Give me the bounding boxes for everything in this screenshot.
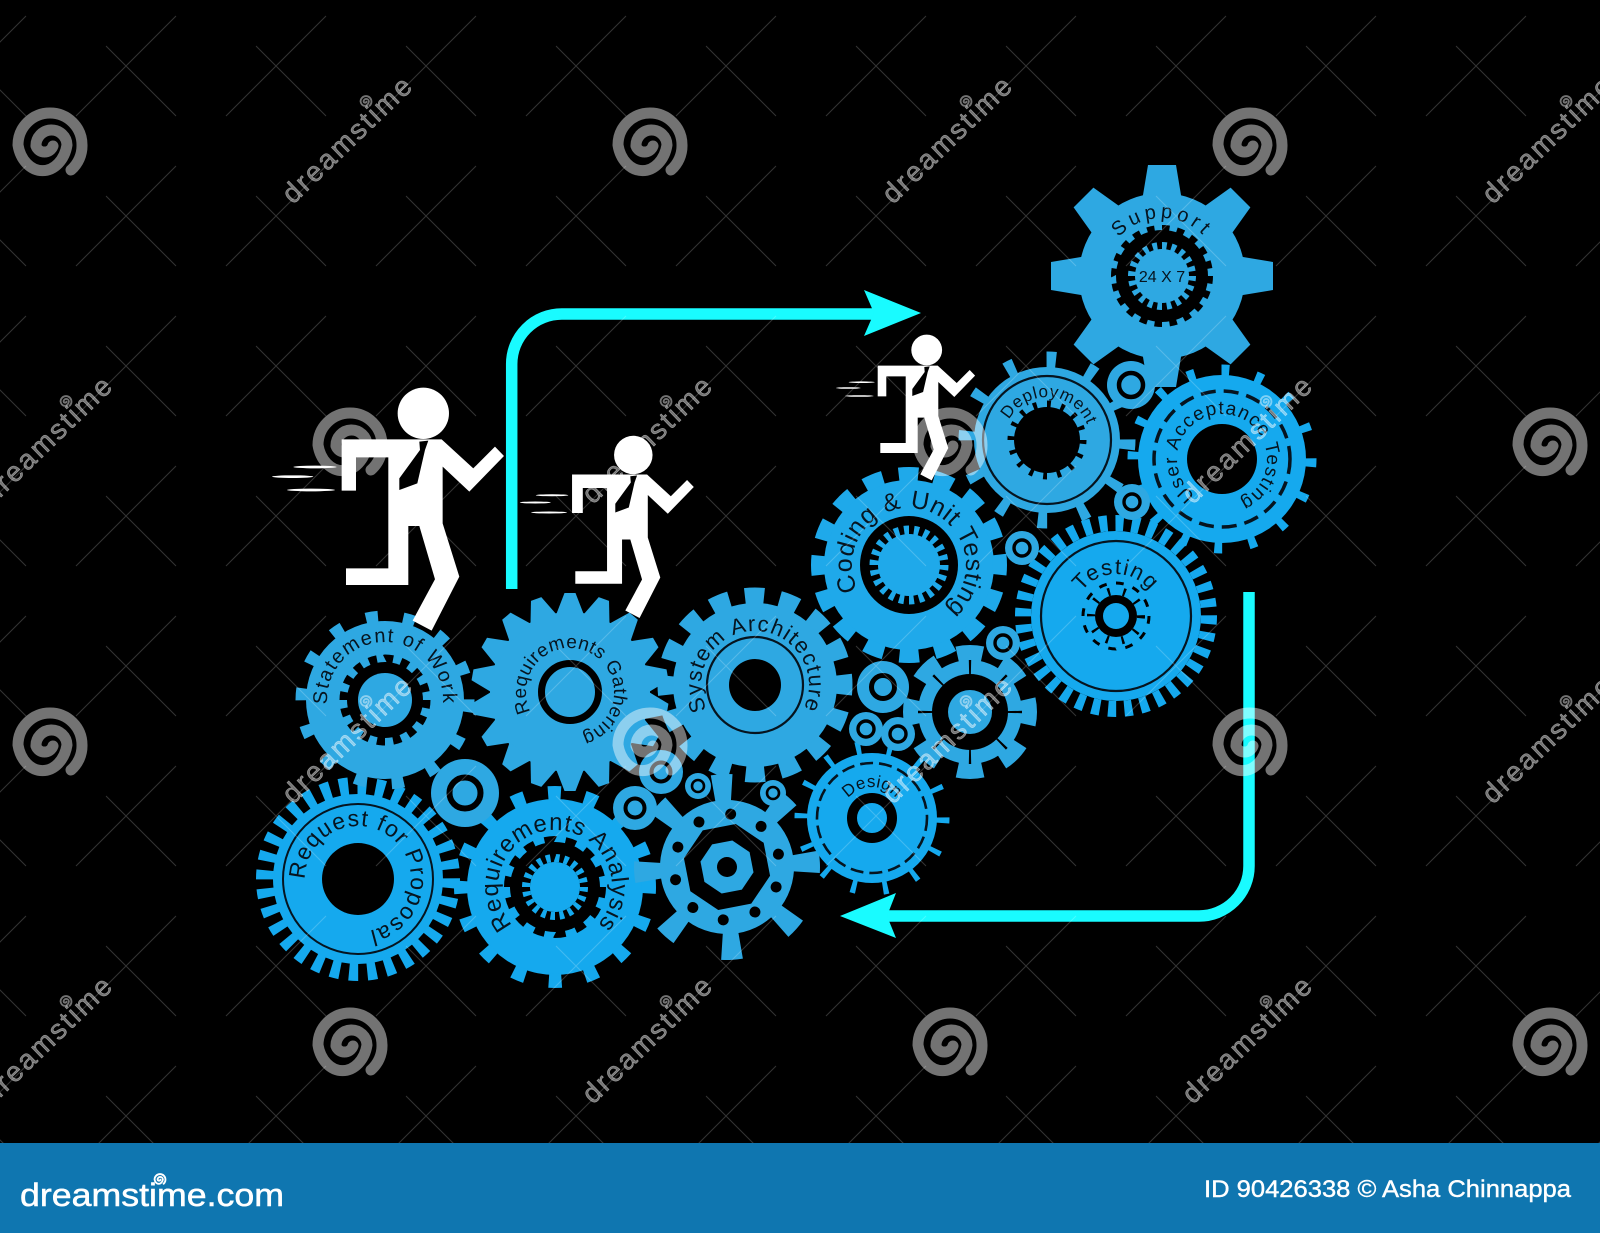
arrow: top forward flow [512, 290, 921, 589]
gear: small star gear [912, 654, 1028, 770]
watermark: dreamstime diagonal text: dreamstime [576, 369, 720, 509]
gear: Testing: Testing [1070, 559, 1157, 591]
runner: large businessman [272, 388, 504, 631]
gear: Support: 24 X 7 [1139, 269, 1185, 286]
watermark: spirals [18, 96, 1582, 1071]
runner: small businessman [836, 335, 975, 480]
arrow: bottom return flow [840, 592, 1249, 938]
gear: Statement of Work [296, 610, 474, 790]
gear: Deployment: Deployment [1000, 386, 1096, 424]
gear: User Acceptance Testing [1128, 364, 1316, 554]
gear: User Acceptance Testing: User Acceptance Testing [1166, 402, 1280, 508]
gear: System Architecture [658, 588, 852, 782]
gear: Request for Proposal [256, 778, 460, 981]
watermark: dreamstime diagonal text: dreamstime [876, 69, 1020, 209]
gear: Deployment [958, 352, 1136, 528]
footer credit text: ID 90426338 © Asha Chinnappa [1204, 1176, 1572, 1203]
footer logo text: dreamstime.com [20, 1177, 284, 1213]
gear: octagon nut gear [644, 784, 810, 950]
gear: Request for Proposal: Request for Proposal [288, 811, 424, 946]
gear: Coding and Unit Testing: Coding & Unit Testing [837, 490, 982, 616]
watermark: dreamstime diagonal text: dreamstime [1176, 369, 1320, 509]
watermark: dreamstime diagonal text: dreamstime [276, 69, 420, 209]
watermark: dreamstime diagonal text: dreamstime [876, 669, 1020, 809]
footer logo swirl [155, 1174, 165, 1184]
gear: Requirements Analysis: Requirements Analysis [485, 816, 629, 933]
watermark: dreamstime diagonal text: dreamstime [576, 969, 720, 1109]
watermark: dreamstime diagonal text: dreamstime [1176, 969, 1320, 1109]
gear: Statement of Work: Statement of Work [313, 629, 458, 704]
watermark: dreamstime diagonal text: dreamstime [276, 669, 420, 809]
gear: Requirements Analysis [454, 786, 656, 988]
gear: Requirements Gathering [472, 593, 668, 791]
gear: Coding and Unit Testing [811, 467, 1007, 663]
gear: System Architecture: System Architecture [688, 618, 821, 712]
gear: Support: Support [1112, 207, 1210, 235]
gear: Testing [1015, 515, 1217, 717]
footer band [0, 1143, 1600, 1233]
runner: medium businessman [520, 436, 694, 618]
gear: Support [1051, 165, 1273, 387]
gear: Design [794, 742, 950, 895]
small idler gears [431, 361, 1155, 830]
gear: Requirements Gathering: Requirements Gathering [515, 638, 628, 744]
gear: Design: Design [841, 775, 900, 798]
